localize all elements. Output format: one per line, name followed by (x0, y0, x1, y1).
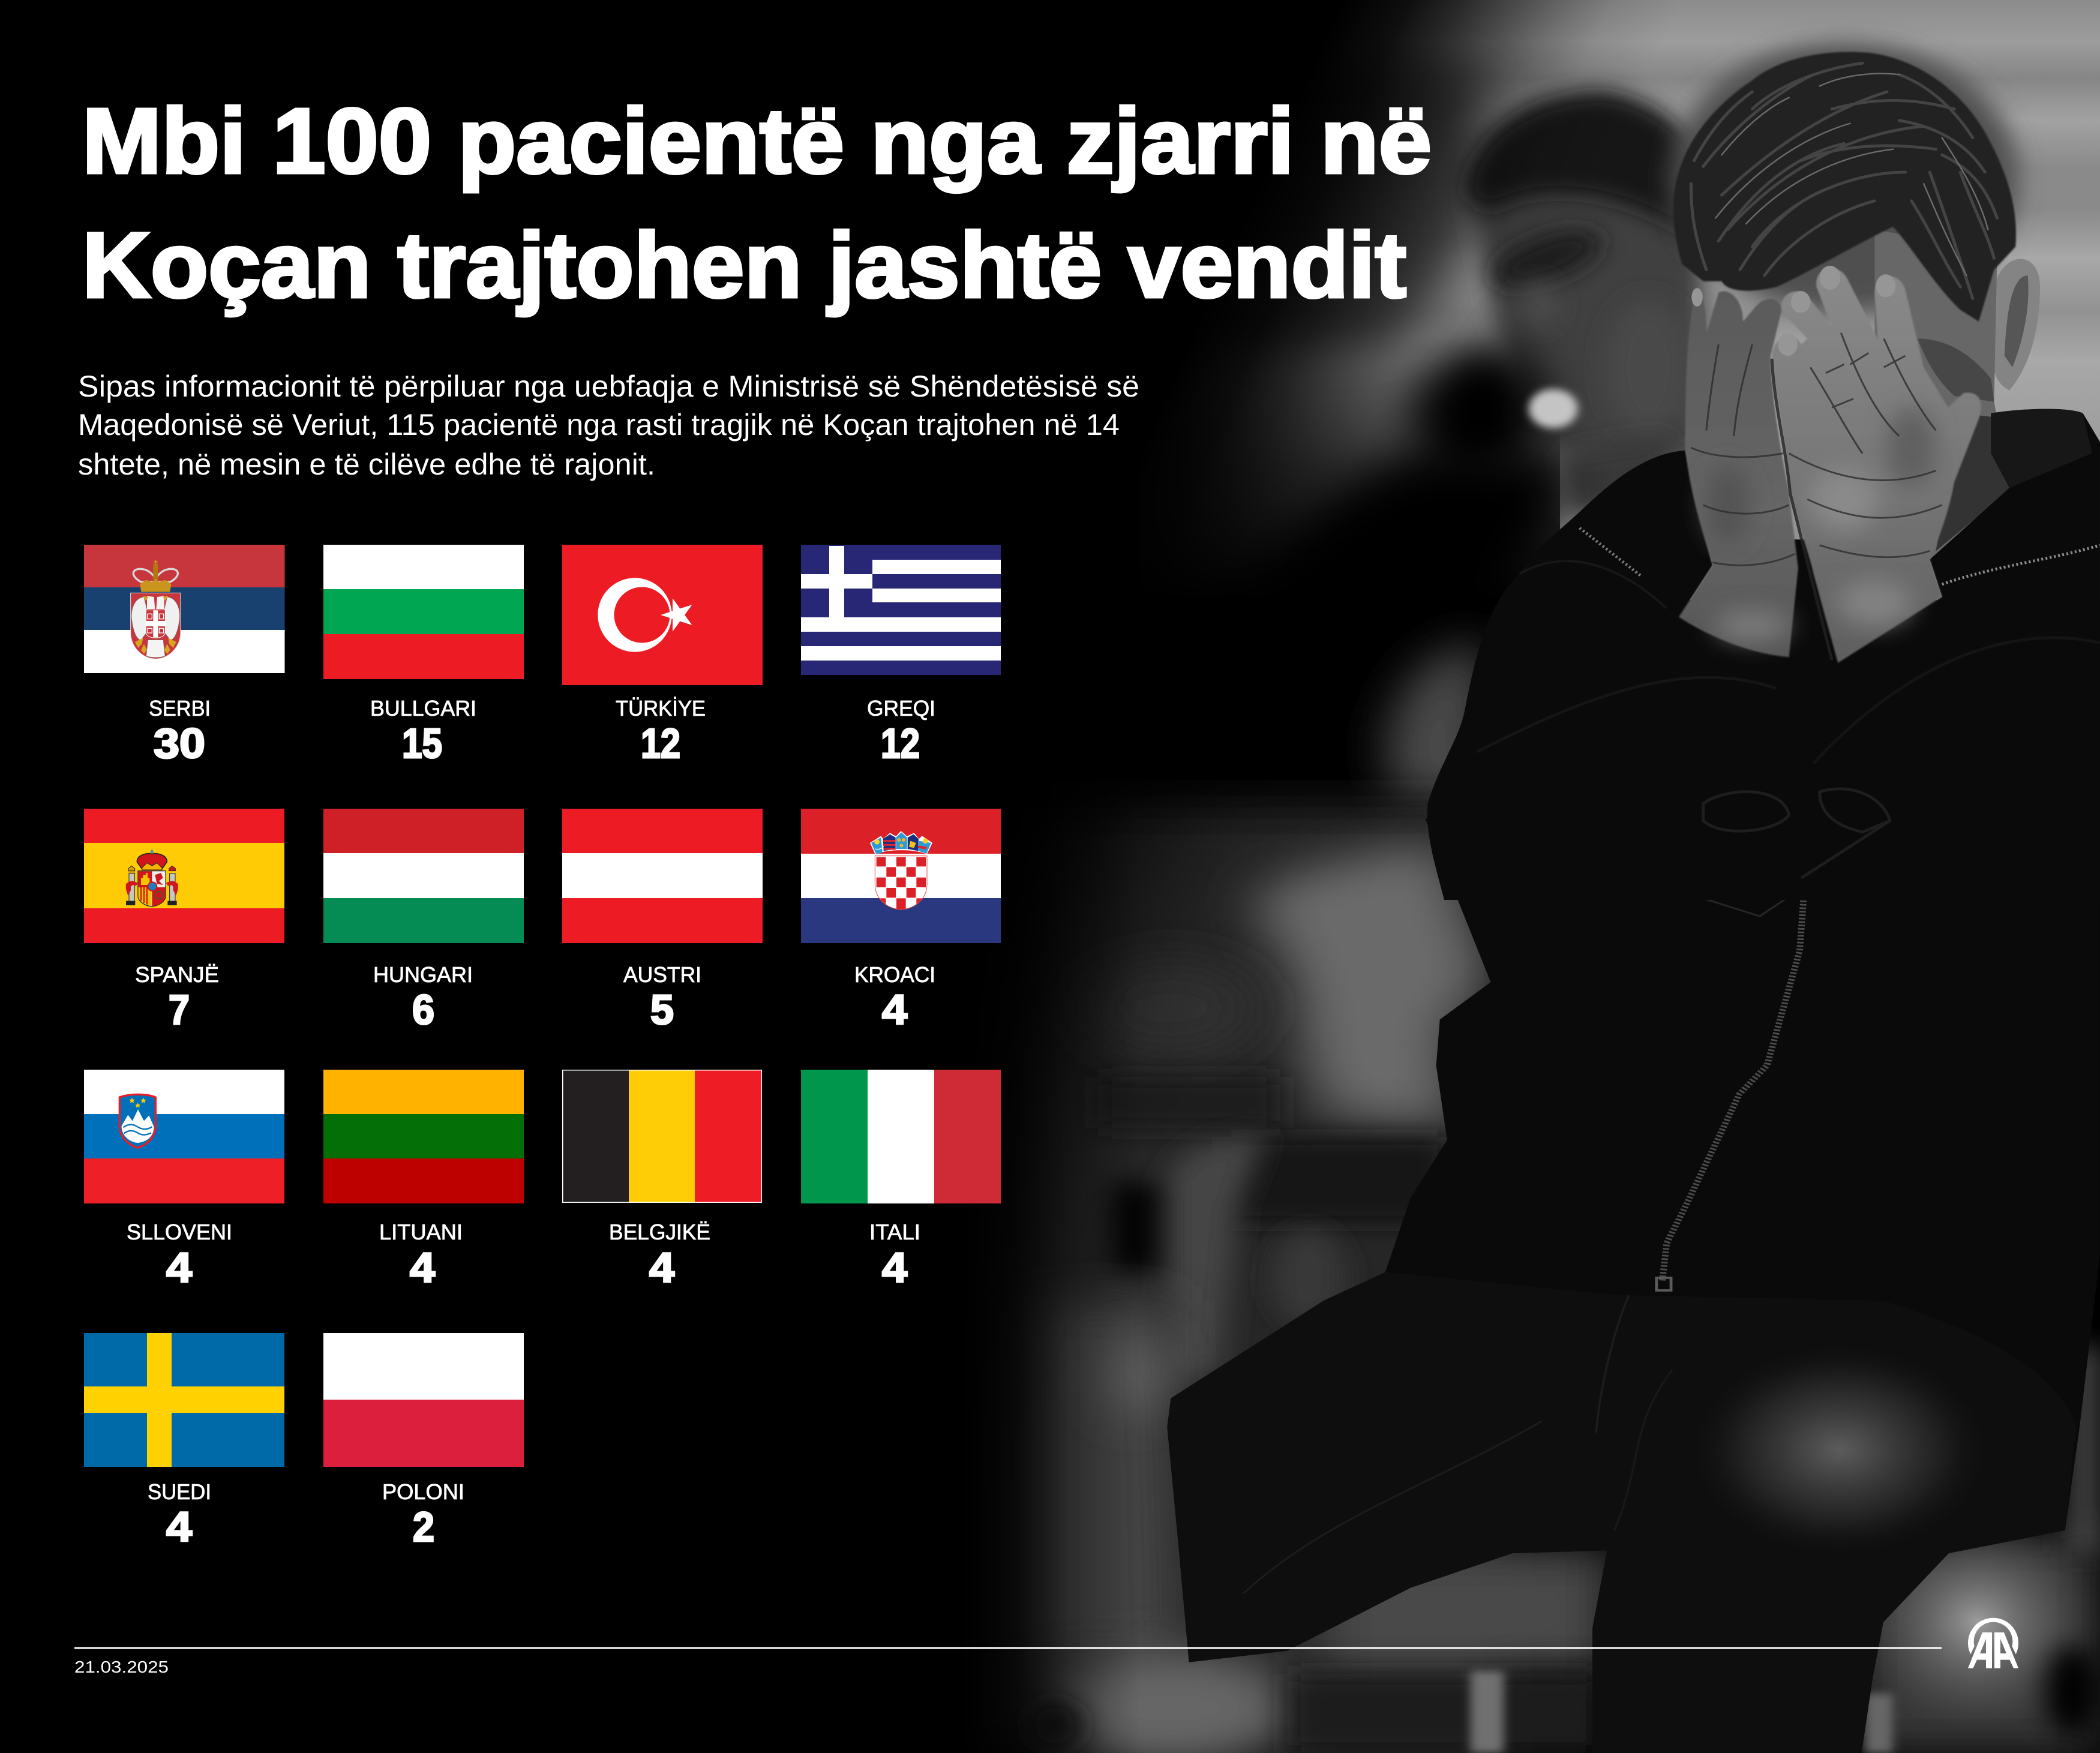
number: 4 (882, 986, 907, 1033)
label: TÜRKİYE (616, 696, 706, 721)
number: 4 (166, 1244, 192, 1291)
number: 12 (881, 720, 920, 767)
country: Türkiye (562, 545, 763, 767)
collar zippers (1580, 528, 1642, 577)
footer rule (74, 1647, 1942, 1649)
country: Croatia (801, 809, 1001, 1033)
country: Italy (801, 1070, 1001, 1291)
blurred background: lower figures (946, 807, 2100, 1753)
country: Spain (84, 809, 284, 1033)
label: GREQI (867, 696, 935, 721)
flag: Slovenia (84, 1070, 284, 1203)
number: 7 (169, 986, 190, 1033)
number: 5 (650, 986, 674, 1033)
blurred background: person behind (1177, 69, 1706, 803)
flag: Croatia (801, 809, 1001, 943)
country: Hungary (323, 809, 524, 1033)
country: Serbia (84, 545, 284, 767)
label: SERBI (149, 696, 211, 721)
background wall with blinds (1140, 0, 2100, 600)
flag: Poland (323, 1333, 524, 1467)
title: Mbi 100 pacientë nga zjarri në (82, 89, 1432, 193)
intro text: Sipas informacionit të përpiluar nga uebfaqja e Ministrisë së Shëndetësisë së (78, 370, 1139, 403)
country: Poland (323, 1333, 524, 1550)
number: 2 (413, 1503, 434, 1550)
flag: Belgium (562, 1070, 762, 1203)
intro text (78, 370, 1139, 481)
label: BULLGARI (370, 696, 476, 721)
country: Slovenia (84, 1070, 284, 1291)
hand shading (1706, 407, 1936, 641)
hair (1673, 52, 2016, 322)
number: 4 (410, 1244, 435, 1291)
glasses (1703, 789, 1890, 878)
man: torso and legs (1167, 819, 2100, 1753)
title (82, 89, 1432, 317)
flag: Serbia (84, 545, 284, 673)
number: 15 (402, 720, 442, 767)
lower black fade (900, 660, 1152, 1753)
flag: Sweden (84, 1333, 284, 1467)
label: BELGJIKË (609, 1220, 710, 1244)
flag: Hungary (323, 809, 524, 943)
label: AUSTRI (623, 962, 701, 987)
label: HUNGARI (373, 962, 473, 987)
label: SLLOVENI (127, 1220, 232, 1244)
flag: Greece (801, 545, 1001, 675)
jacket (1427, 409, 2100, 900)
flag: Türkiye (562, 545, 763, 685)
country: Bulgaria (323, 545, 524, 767)
number: 4 (882, 1244, 907, 1291)
halo (1670, 43, 2018, 313)
label: ITALI (869, 1220, 920, 1244)
country: Lithuania (323, 1070, 524, 1291)
intro text: shtete, në mesin e të cilëve edhe të rajonit. (78, 448, 655, 481)
country: Sweden (84, 1333, 284, 1550)
ear (1992, 259, 2040, 390)
flag: Italy (801, 1070, 1001, 1203)
country: Greece (801, 545, 1001, 767)
wall lower fade (1140, 336, 1560, 601)
flag: Austria (562, 809, 763, 943)
title: Koçan trajtohen jashtë vendit (82, 214, 1406, 317)
label: LITUANI (379, 1220, 463, 1244)
flag: Bulgaria (323, 545, 524, 679)
number: 4 (166, 1503, 192, 1550)
intro text: Maqedonisë së Veriut, 115 pacientë nga rasti tragjik në Koçan trajtohen në 14 (78, 408, 1120, 442)
flag: Spain (84, 809, 284, 943)
label: SPANJË (135, 962, 219, 987)
man: head, hands and jacket (1427, 43, 2100, 900)
number: 6 (412, 986, 434, 1033)
icon: Anadolu Agency logo (1968, 1618, 2018, 1668)
face (1874, 230, 2009, 562)
zipper (1663, 853, 1825, 1281)
number: 30 (154, 720, 205, 767)
date: 21.03.2025 (74, 1658, 169, 1676)
left hand (1679, 291, 1798, 657)
panel: countries and patient counts (84, 545, 1001, 1550)
label: KROACI (854, 962, 935, 987)
label: POLONI (382, 1479, 464, 1504)
finger shadows and wrinkles (1691, 333, 1942, 660)
flag: Lithuania (323, 1070, 524, 1203)
right hand (1772, 268, 1981, 663)
label: SUEDI (148, 1479, 211, 1504)
number: 12 (641, 720, 680, 767)
number: 4 (649, 1244, 674, 1291)
country: Belgium (562, 1070, 762, 1291)
country: Austria (562, 809, 763, 1033)
